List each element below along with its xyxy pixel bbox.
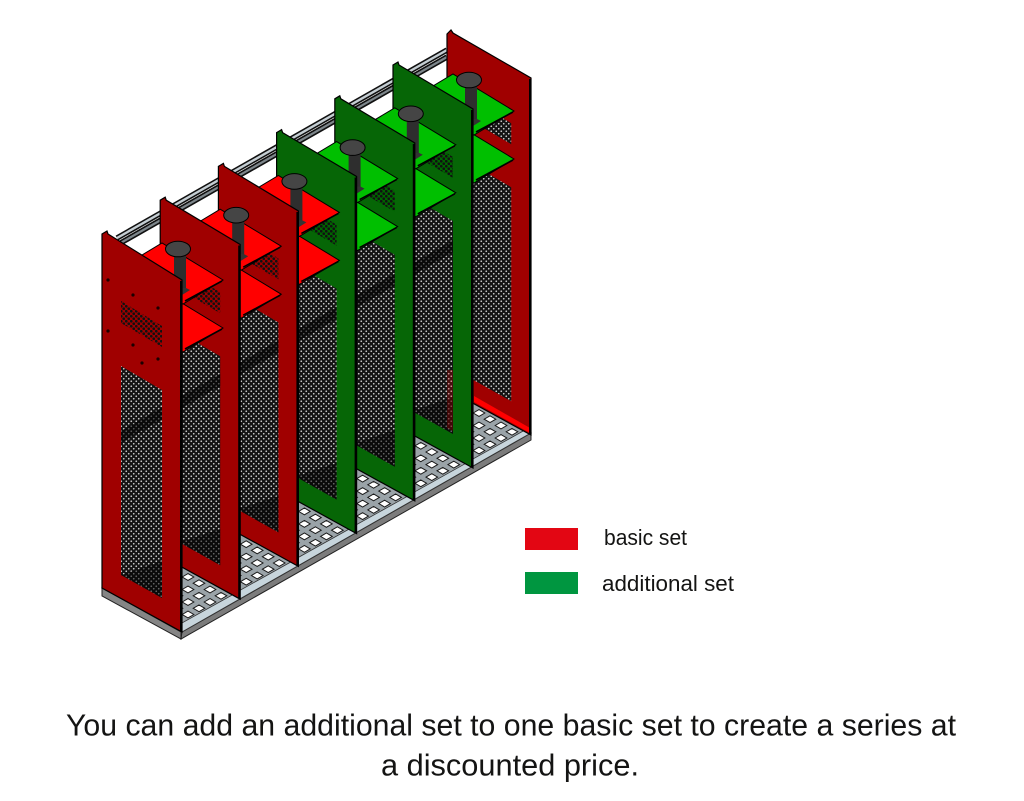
legend	[525, 525, 734, 596]
panel 3: basic set	[218, 163, 298, 566]
panel 4: additional set	[277, 130, 357, 534]
legend swatch: additional set	[525, 572, 578, 594]
back panel: basic set	[447, 30, 531, 435]
shelf unit 2: basic set	[180, 207, 281, 318]
top rails	[117, 50, 447, 245]
shelf unit 5: additional set	[355, 106, 456, 217]
rack illustration	[102, 30, 531, 639]
shelf unit 1: basic set	[122, 241, 223, 352]
front panel: basic set	[102, 231, 182, 632]
panel 6: additional set	[393, 62, 473, 468]
caption line 2: a discounted price.	[381, 748, 639, 782]
legend label: basic set: basic set	[604, 525, 687, 550]
legend swatch: basic set	[525, 528, 578, 550]
panel 2: basic set	[160, 197, 240, 599]
shelf unit 4: additional set	[297, 140, 398, 251]
shelf unit 3: basic set	[238, 174, 339, 284]
base with floor grating	[102, 389, 531, 639]
legend label: additional set: additional set	[602, 571, 734, 596]
caption line 1: You can add an additional set to one basic set to create a series at	[66, 708, 956, 742]
panel 5: additional set	[335, 96, 415, 501]
shelf unit 6: additional set	[413, 72, 514, 183]
caption	[66, 708, 956, 782]
